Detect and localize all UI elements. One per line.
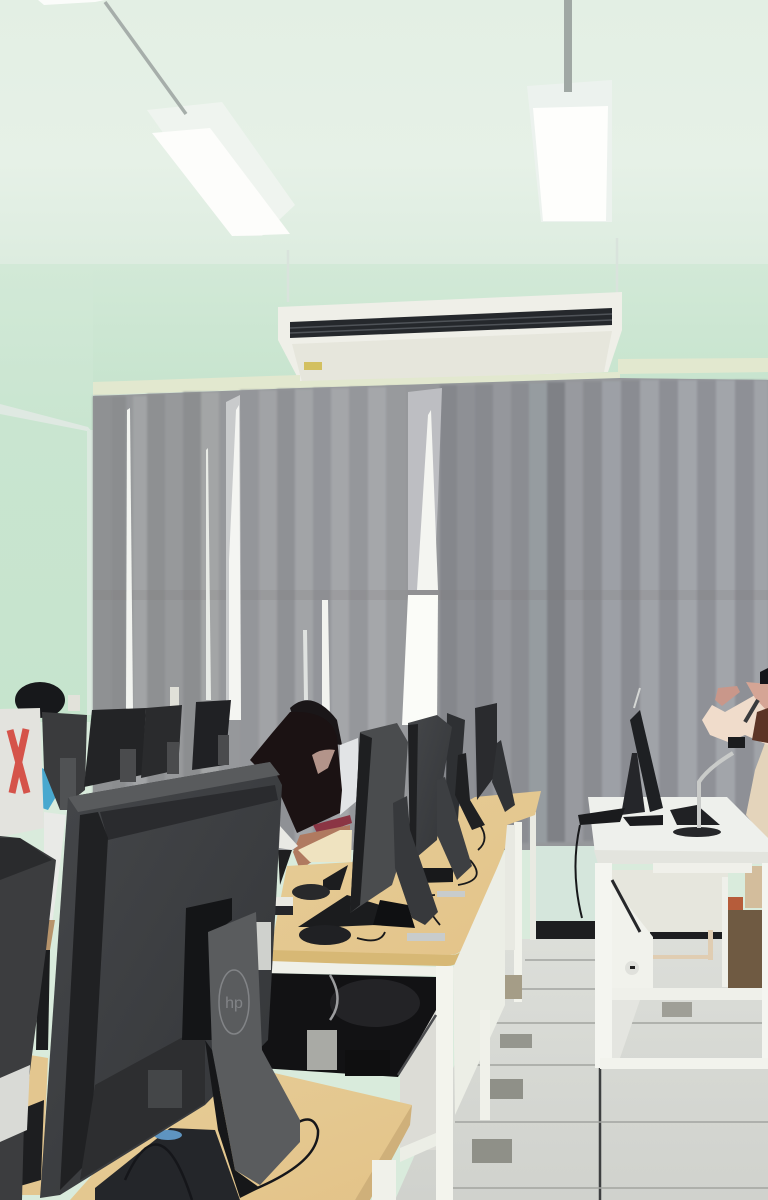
back row student — [15, 682, 65, 810]
student behind left monitor — [36, 812, 66, 1050]
keyboard left — [20, 1100, 44, 1186]
row monitor 4 — [475, 703, 515, 812]
teacher keyboard and microphone — [670, 700, 758, 837]
front monitor stand — [205, 912, 300, 1198]
ceiling light left — [147, 102, 295, 236]
front row desk — [270, 791, 541, 1200]
hp logo: hp — [225, 995, 243, 1012]
teacher — [702, 668, 768, 988]
wall below window — [535, 846, 728, 940]
ceiling — [0, 0, 768, 272]
row monitor 2 — [408, 715, 472, 880]
left edge monitor — [0, 836, 56, 1200]
seated students — [250, 700, 358, 885]
window ledge — [93, 358, 768, 395]
front monitor — [40, 762, 282, 1198]
ceiling light right — [527, 80, 612, 222]
legs and chair under desk — [260, 973, 436, 1077]
teacher monitor — [575, 688, 663, 918]
row monitor 1 — [350, 723, 438, 925]
hp logo — [219, 970, 249, 1034]
teacher desk — [588, 797, 768, 1069]
keyboards and mice on desk — [274, 825, 485, 945]
floor — [395, 939, 768, 1200]
back row monitors — [42, 687, 231, 810]
monitor base and cables — [95, 1119, 318, 1200]
conduit pipes — [105, 0, 572, 114]
front desk — [20, 1055, 412, 1200]
ceiling light corner — [38, 0, 105, 5]
air conditioner — [278, 238, 622, 382]
far desk legs — [502, 812, 536, 1002]
back wall — [0, 264, 768, 389]
left wall — [0, 264, 93, 722]
vertical blinds — [93, 378, 768, 850]
row monitor 3 — [446, 713, 485, 830]
sign: red cross — [0, 708, 44, 836]
